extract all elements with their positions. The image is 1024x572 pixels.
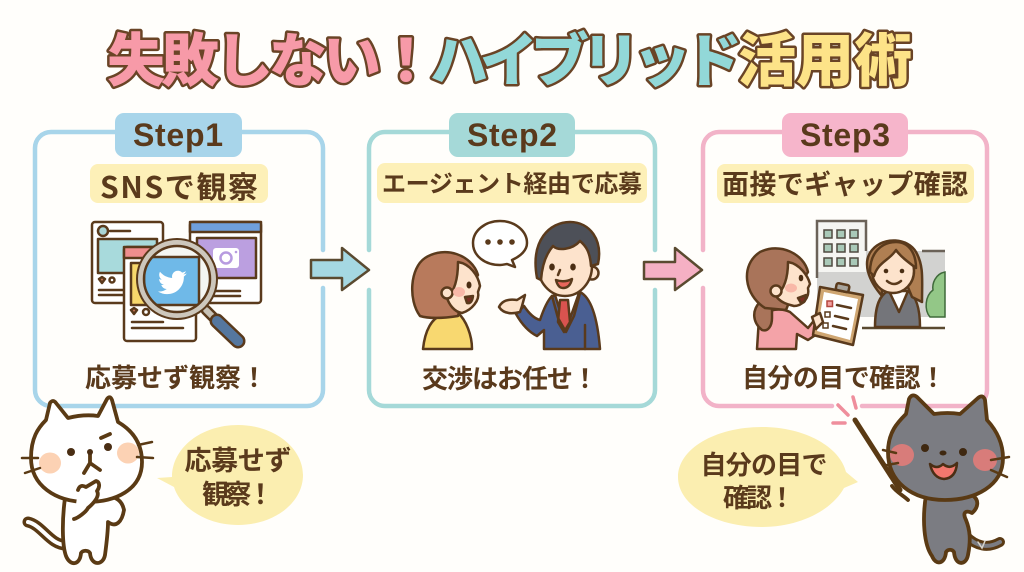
tail — [966, 536, 1000, 546]
job seeker woman — [747, 248, 823, 349]
watermark sparkle — [978, 541, 985, 548]
receptionist — [867, 240, 922, 327]
character: black cat with pointer — [855, 395, 1009, 563]
illustration: checking the workplace at an interview — [747, 221, 945, 349]
title: 失敗しない！ — [107, 14, 431, 98]
icon: social feeds under a magnifying glass — [92, 222, 261, 341]
heading: SNSで観察: SNSで観察 — [100, 163, 258, 207]
heading: 面接でギャップ確認: 面接でギャップ確認 — [722, 163, 968, 202]
panel: step 2 — [369, 113, 655, 406]
badge: Step3: Step3 — [800, 117, 890, 153]
arrow: step 1 to step 2 — [311, 248, 369, 290]
caption: 応募せず観察!: 応募せず観察！ — [85, 358, 267, 395]
character: thinking white cat — [22, 397, 153, 563]
speech bubble: 自分の目で確認!: 自分の目で — [700, 445, 828, 482]
job seeker woman — [412, 252, 480, 349]
badge: Step2: Step2 — [467, 117, 557, 153]
speech bubble: 応募せず観察! — [157, 425, 303, 525]
tail — [28, 522, 66, 545]
head — [888, 395, 1003, 500]
mouth — [930, 463, 957, 479]
speech bubble: 応募せず観察!: 応募せず — [184, 439, 292, 478]
clipboard checklist — [812, 283, 863, 345]
speech bubble: 応募せず観察!: 観察！ — [202, 473, 274, 512]
badge: Step1 — [115, 113, 242, 157]
caption: 自分の目で確認!: 自分の目で確認！ — [742, 358, 946, 395]
office building and backdrop — [817, 221, 945, 328]
badge: Step3 — [782, 113, 908, 157]
speech bubble with dots — [473, 221, 527, 267]
panel: step 3 — [703, 113, 987, 406]
centre post card — [124, 247, 196, 341]
accent: pointer sparks — [833, 397, 856, 423]
title: 活用術 — [738, 14, 912, 98]
heading: エージェント経由で応募: エージェント経由で応募 — [382, 164, 642, 199]
title: ハイブリッド — [430, 14, 738, 98]
whiskers — [22, 442, 153, 473]
badge: Step1: Step1 — [133, 117, 223, 153]
right post card — [190, 222, 261, 303]
badge: Step2 — [449, 113, 575, 157]
speech bubble: 自分の目で確認!: 確認！ — [723, 478, 795, 515]
raised paw — [892, 486, 908, 500]
agent man in suit — [499, 222, 600, 349]
body — [63, 495, 124, 563]
arrow: step 2 to step 3 — [644, 248, 702, 290]
head — [31, 397, 142, 502]
body — [924, 495, 977, 563]
panel: step 1 — [35, 113, 323, 406]
whiskers — [883, 450, 1009, 477]
pointer stick — [855, 420, 900, 490]
icon: bird — [158, 271, 187, 294]
title — [107, 14, 912, 98]
left post card — [92, 222, 163, 303]
speech bubble: 自分の目で確認! — [678, 427, 858, 527]
magnifying glass — [136, 238, 238, 341]
caption: 交渉はお任せ!: 交渉はお任せ！ — [422, 359, 598, 396]
illustration: agent talking with job seeker — [412, 221, 600, 349]
paw on chin — [74, 481, 99, 519]
